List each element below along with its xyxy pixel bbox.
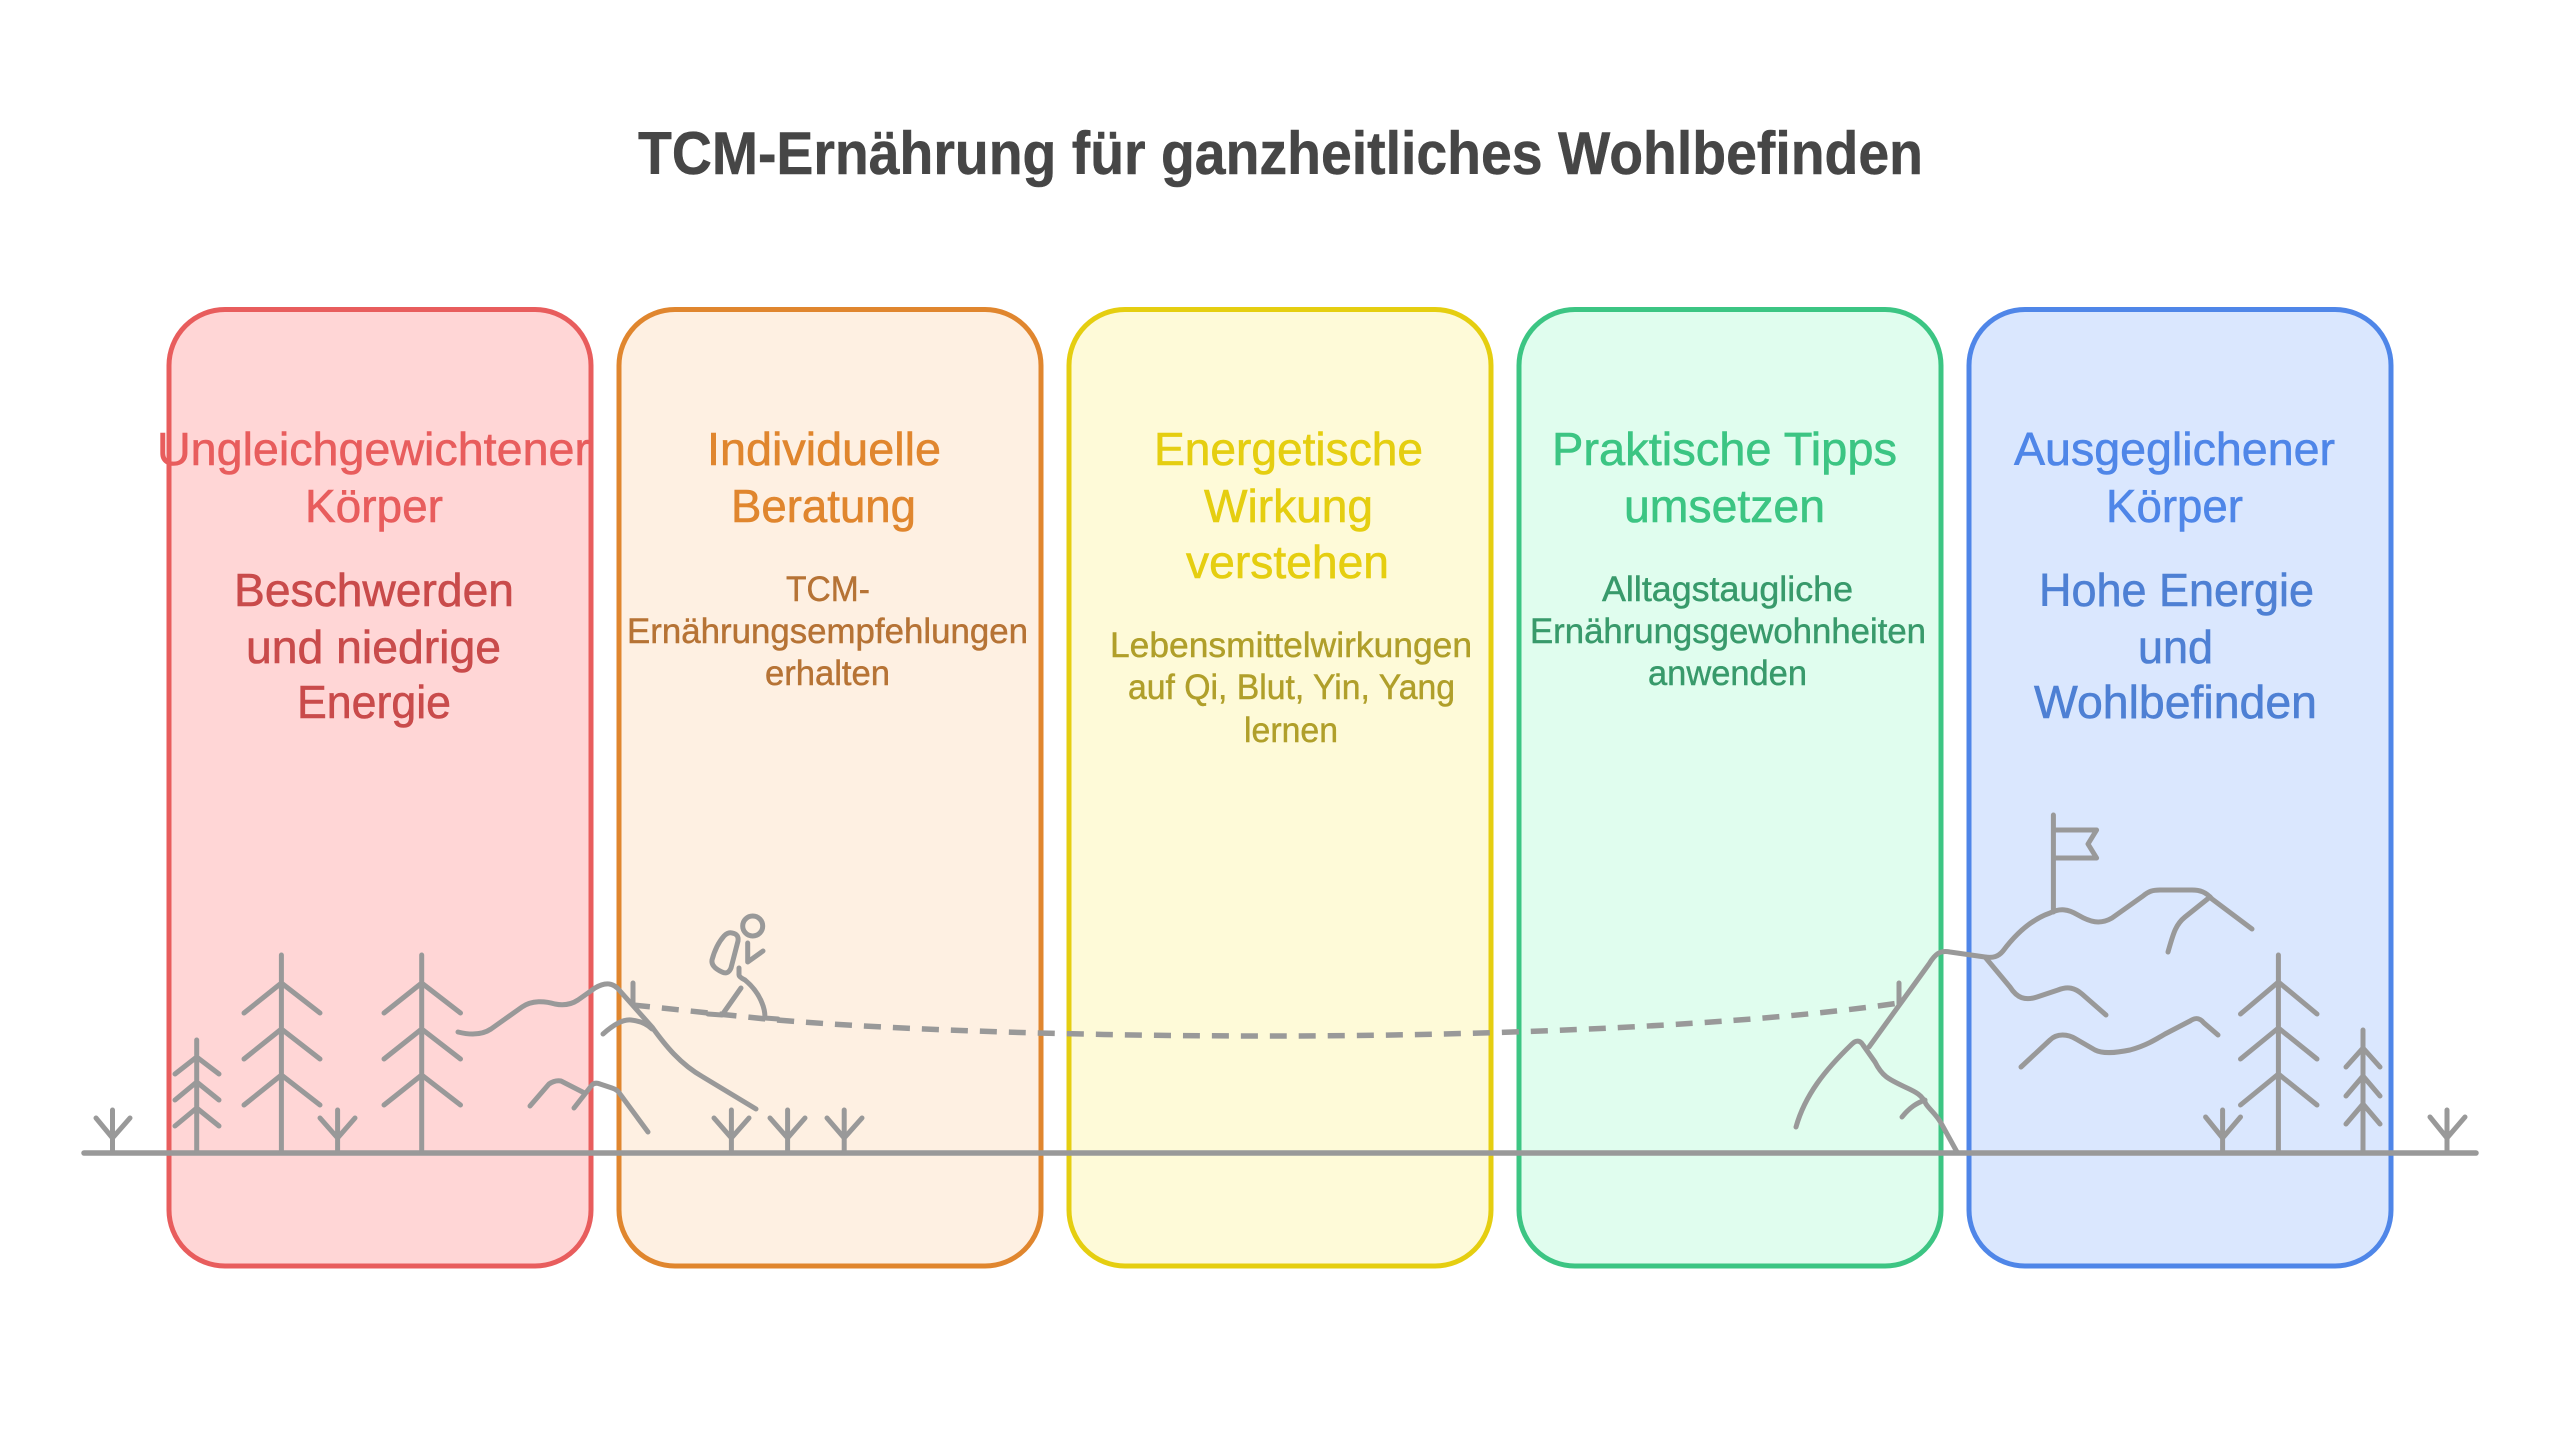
description: Beschwerden	[234, 564, 514, 616]
description: Alltagstaugliche	[1602, 570, 1853, 609]
description	[1110, 626, 1472, 750]
description: anwenden	[1648, 654, 1807, 693]
description	[627, 570, 1028, 693]
description: Hohe Energie	[2039, 564, 2314, 616]
heading: Praktische Tipps	[1552, 423, 1897, 475]
icon: hiker	[708, 916, 778, 1019]
description	[2034, 564, 2317, 728]
heading: verstehen	[1186, 536, 1389, 588]
heading: Körper	[305, 480, 443, 532]
description: auf Qi, Blut, Yin, Yang	[1128, 668, 1455, 707]
heading: umsetzen	[1624, 480, 1825, 532]
panel: Ungleichgewichtener Körper	[157, 310, 591, 1266]
description: Wohlbefinden	[2034, 676, 2317, 728]
heading	[2014, 423, 2335, 532]
heading: Beratung	[731, 480, 916, 532]
description: und	[2138, 621, 2213, 673]
description	[234, 564, 514, 728]
description: TCM-	[786, 570, 870, 609]
heading: Wirkung	[1204, 480, 1373, 532]
description: Ernährungsempfehlungen	[627, 612, 1028, 651]
description: Energie	[297, 676, 451, 728]
dashed trail	[633, 1003, 1899, 1036]
panel: Ausgeglichener Körper	[1969, 310, 2391, 1266]
heading: Körper	[2106, 480, 2243, 532]
heading: Ungleichgewichtener	[157, 423, 590, 475]
panel: Praktische Tipps umsetzen	[1519, 310, 1941, 1266]
ground line	[84, 1150, 2476, 1156]
panel background	[1069, 310, 1491, 1266]
panel background	[619, 310, 1041, 1266]
icon: trees and sprouts right	[2206, 955, 2465, 1153]
panel: Energetische Wirkung verstehen	[1069, 310, 1491, 1266]
description: und niedrige	[246, 621, 501, 673]
panel background	[169, 310, 591, 1266]
description: Ernährungsgewohnheiten	[1530, 612, 1926, 651]
heading: Ausgeglichener	[2014, 423, 2335, 475]
heading: Energetische	[1154, 423, 1423, 475]
description: erhalten	[765, 654, 890, 693]
heading	[1154, 423, 1423, 588]
icon: trees and sprouts left	[96, 955, 862, 1153]
icon: summit flag	[2053, 815, 2097, 912]
panel background	[1969, 310, 2391, 1266]
panel: Individuelle Beratung	[619, 310, 1041, 1266]
description: Lebensmittelwirkungen	[1110, 626, 1472, 665]
description	[1530, 570, 1926, 693]
heading	[157, 423, 590, 532]
heading: Individuelle	[707, 423, 941, 475]
icon: mountains left	[458, 984, 756, 1132]
icon: mountains right	[1796, 890, 2252, 1152]
panel background	[1519, 310, 1941, 1266]
title: TCM-Ernährung für ganzheitliches Wohlbefinden	[638, 120, 1923, 187]
description: lernen	[1244, 711, 1338, 750]
heading	[707, 423, 941, 532]
trail start and end ticks	[633, 983, 1899, 1005]
heading	[1552, 423, 1897, 532]
